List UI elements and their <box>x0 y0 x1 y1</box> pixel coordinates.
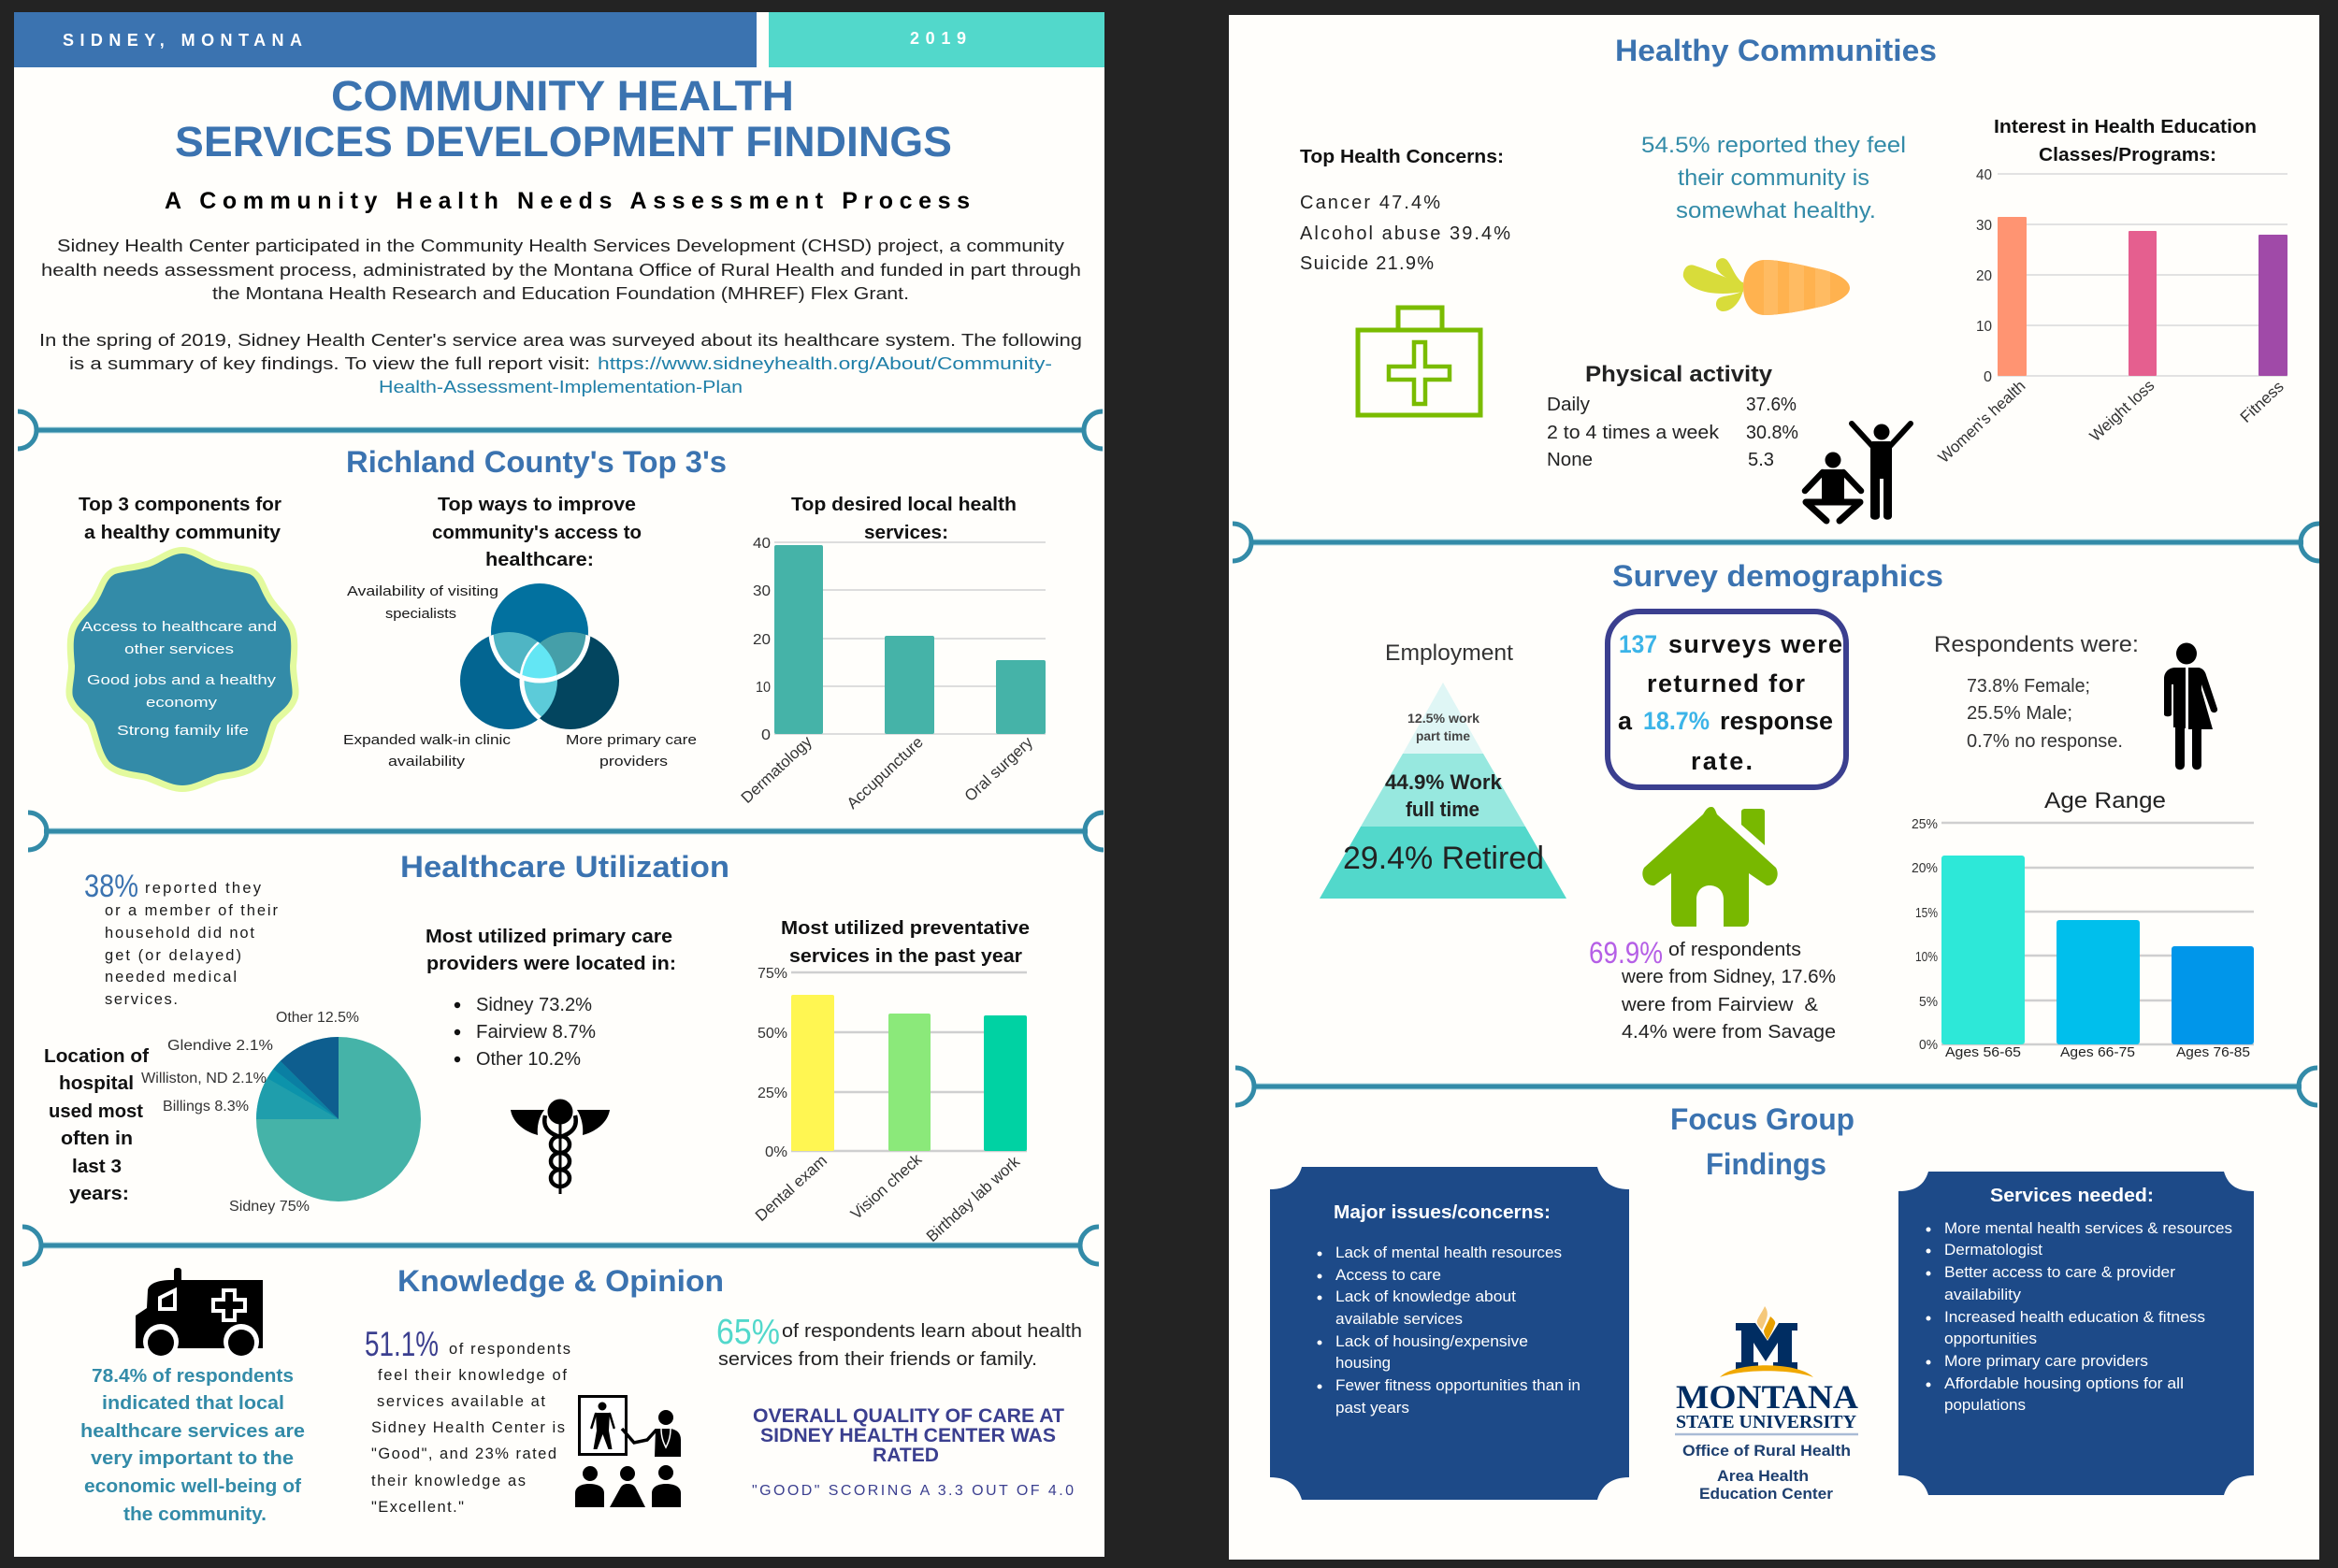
heading: top 3 components <box>79 495 281 543</box>
list: major issues: Access to care <box>1335 1266 1441 1284</box>
heading: top 3 components: a healthy community <box>84 523 281 543</box>
badge text: Strong family life <box>117 723 249 739</box>
heading: preventative <box>781 918 1030 967</box>
text block: 51.1%: 51.1% <box>365 1325 439 1363</box>
callout: 54.5% <box>1641 133 1906 223</box>
venn labels: Expanded walk-in clinic <box>343 732 512 748</box>
bar chart: age range: 5% <box>1919 994 1938 1010</box>
section heading: Healthcare Utilization: Healthcare Utilization <box>400 850 729 884</box>
text block: location of hospital: often in <box>61 1129 133 1149</box>
icon: ambulance <box>136 1268 263 1359</box>
list: major issues <box>1317 1244 1580 1417</box>
bar chart: age range: 15% <box>1915 905 1938 921</box>
text block: 51.1%: feel their knowledge of <box>378 1367 567 1384</box>
heading: ways to improve: Top ways to improve <box>438 495 636 515</box>
list: major issues: Lack of housing/expensive <box>1335 1332 1528 1350</box>
heading: employment: Employment <box>1385 640 1513 666</box>
text block: respondents <box>1934 632 2139 752</box>
text block: location of hospital: used most <box>49 1101 143 1122</box>
text block: 69.9%: were from Sidney, 17.6% <box>1621 967 1836 987</box>
callout: survey response box: 18.7% <box>1643 707 1710 735</box>
text block: 51.1%: Sidney Health Center is <box>371 1419 565 1436</box>
icon: carrot <box>1683 257 1852 318</box>
text block: 51.1%: "Good", and 23% rated <box>371 1446 556 1462</box>
text block: 78.4%: healthcare services are <box>80 1421 305 1442</box>
bar chart: desired services <box>738 536 1046 813</box>
badge text: other services <box>124 641 234 657</box>
list: services needed: populations <box>1944 1396 2026 1414</box>
text block: 65%: services from their friends or family. <box>718 1349 1037 1370</box>
callout: overall quality: "GOOD" SCORING A 3.3 OUT OF 4.0 <box>752 1483 1074 1499</box>
list: services needed: More primary care providers <box>1944 1352 2148 1370</box>
text block: primary care providers: Fairview 8.7% <box>476 1022 596 1043</box>
text block: location of hospital <box>44 1046 149 1204</box>
intro text: https://www.sidneyhealth.org/About/Community- <box>598 354 1052 373</box>
table: physical activity: Daily <box>1547 395 1590 415</box>
bar chart: preventative: 25% <box>758 1086 787 1101</box>
panel: top 3 components <box>72 495 293 785</box>
venn labels: More primary care <box>566 732 697 748</box>
bar chart: preventative: Birthday lab work <box>923 1153 1023 1245</box>
callout: 54.5%: somewhat healthy. <box>1676 198 1876 223</box>
heading: age range: Age Range <box>2044 788 2166 813</box>
text block: 69.9%: were from Fairview & <box>1621 995 1819 1015</box>
heading: ways to improve: healthcare: <box>485 550 594 570</box>
text block: 51.1%: services available at <box>377 1393 545 1410</box>
text block: 78.4%: very important to the <box>91 1448 294 1469</box>
panel: preventative services <box>752 918 1030 1245</box>
heading: top 3 components: Top 3 components for <box>79 495 281 515</box>
section heading: Focus Group Findings: Findings <box>1706 1147 1826 1181</box>
title <box>175 72 952 165</box>
text block: primary care providers: Other 10.2% <box>476 1049 581 1070</box>
bar chart: preventative: 0% <box>765 1144 787 1160</box>
list: major issues: past years <box>1335 1399 1409 1417</box>
bar chart: preventative: 50% <box>758 1026 787 1042</box>
subtitle: A Community Health Needs Assessment Process <box>165 188 970 214</box>
list: services needed: More mental health services & resources <box>1944 1219 2232 1237</box>
pie chart: hospital location: Billings 8.3% <box>163 1099 249 1115</box>
section heading: Focus Group Findings: Focus Group <box>1670 1102 1855 1136</box>
venn diagram <box>460 583 619 729</box>
bar chart: desired services: 20 <box>753 632 771 648</box>
bar chart: age range: Ages 66-75 <box>2060 1044 2135 1060</box>
list: services needed: Dermatologist <box>1944 1241 2042 1259</box>
badge text: economy <box>146 695 218 711</box>
bar chart: age range: Ages 76-85 <box>2176 1044 2250 1060</box>
text block: location of hospital: Location of <box>44 1046 149 1067</box>
intro text: Health-Assessment-Implementation-Plan <box>379 378 743 396</box>
text block: 65%: of respondents learn about health <box>782 1321 1082 1342</box>
heading: preventative: Most utilized preventative <box>781 918 1030 939</box>
callout: survey response box: rate. <box>1691 747 1753 775</box>
callout: 54.5%: their community is <box>1678 165 1869 191</box>
text block: 65%: 65% <box>716 1313 780 1352</box>
pyramid: employment: 44.9% Work <box>1385 770 1503 794</box>
bar chart: desired services: 0 <box>761 727 771 743</box>
section heading: Focus Group Findings <box>1670 1102 1855 1181</box>
venn labels: providers <box>599 754 668 770</box>
bar chart: age range: 0% <box>1919 1037 1938 1053</box>
icon: caduceus <box>511 1100 610 1194</box>
bar chart: preventative: Vision check <box>847 1150 926 1223</box>
intro text: is a summary of key findings. To view the full report visit: <box>69 354 590 373</box>
list: services needed: Affordable housing options for all <box>1944 1374 2184 1392</box>
table: physical activity: 37.6% <box>1746 395 1797 415</box>
table: physical activity: Physical activity <box>1585 362 1773 387</box>
text block: 78.4% <box>80 1366 305 1525</box>
panel: major issues: Major issues/concerns: <box>1334 1202 1551 1223</box>
logo: Montana State University: Area Health <box>1717 1467 1809 1485</box>
pie chart: hospital location: Sidney 75% <box>229 1199 310 1215</box>
bar chart: health education: 40 <box>1976 167 1992 183</box>
text block: top health concerns: Alcohol abuse 39.4% <box>1300 223 1510 244</box>
badge text: Access to healthcare and <box>81 619 277 635</box>
badge text: Good jobs and a healthy <box>87 672 277 688</box>
list: major issues: Lack of mental health resources <box>1335 1244 1562 1261</box>
text block: 69.9%: 4.4% were from Savage <box>1622 1022 1836 1043</box>
heading: desired services: services: <box>864 523 948 543</box>
text block: respondents: 0.7% no response. <box>1967 731 2123 752</box>
heading: desired services <box>791 495 1017 543</box>
heading: ways to improve: community's access to <box>432 523 642 543</box>
panel: services needed <box>1898 1172 2254 1495</box>
pie chart: hospital location: Glendive 2.1% <box>167 1038 273 1054</box>
heading: health education <box>1994 117 2257 165</box>
pyramid: employment: part time <box>1416 728 1470 743</box>
bar chart: health education: Fitness <box>2237 378 2287 426</box>
panel: page two <box>1229 15 2319 1560</box>
intro text: In the spring of 2019, Sidney Health Center's service area was surveyed about its healthcare system. The following <box>39 331 1082 350</box>
icon: exercising people <box>1805 424 1911 521</box>
text block: respondents: Respondents were: <box>1934 632 2139 657</box>
panel: health education interest <box>1935 117 2287 467</box>
text block: 38% delayed care: needed medical <box>105 969 237 985</box>
list: major issues: housing <box>1335 1354 1391 1372</box>
panel: major issues <box>1270 1167 1629 1500</box>
callout: 54.5%: 54.5% reported they feel <box>1641 133 1906 158</box>
bar chart: age range: 10% <box>1915 949 1938 965</box>
text block: top health concerns <box>1300 147 1510 274</box>
text block: top health concerns: Suicide 21.9% <box>1300 253 1434 274</box>
text block: 78.4%: economic well-being of <box>84 1476 301 1497</box>
bar chart: age range: Ages 56-65 <box>1945 1044 2021 1060</box>
pyramid: employment: 12.5% work <box>1407 711 1479 726</box>
pie chart: hospital location <box>141 1010 421 1215</box>
text block: primary care providers: Sidney 73.2% <box>476 995 592 1015</box>
text block: 69.9% <box>1589 936 1836 1043</box>
bar chart: desired services: 10 <box>756 680 771 696</box>
text block: 38% delayed care: reported they <box>145 880 262 897</box>
heading: health education: Classes/Programs: <box>2039 145 2216 165</box>
text block: 78.4%: the community. <box>123 1504 267 1525</box>
scalloped badge <box>72 554 293 785</box>
pyramid: employment: 29.4% Retired <box>1343 841 1544 876</box>
bar chart: desired services: Dermatology <box>738 732 815 807</box>
text block: 78.4%: indicated that local <box>102 1393 284 1414</box>
section heading: Survey demographics: Survey demographics <box>1612 559 1943 593</box>
icon: house <box>1642 807 1778 927</box>
venn labels: availability <box>388 754 466 770</box>
callout: survey response box: returned for <box>1647 669 1805 698</box>
text block: 38% delayed care: get (or delayed) <box>105 947 241 964</box>
bar chart: health education: 20 <box>1976 268 1992 284</box>
panel: top desired services <box>738 495 1046 813</box>
bar chart: health education: Women's health <box>1935 377 2028 467</box>
icon: doctor teaching <box>575 1397 681 1507</box>
bar chart: age range <box>1912 816 2254 1060</box>
text block: primary care providers <box>426 927 676 1070</box>
bar chart: age range: 20% <box>1912 860 1938 876</box>
pie chart: hospital location: Williston, ND 2.1% <box>141 1071 267 1086</box>
header band: location <box>14 12 757 67</box>
bar chart: desired services: Oral surgery <box>961 733 1036 805</box>
heading: desired services: Top desired local health <box>791 495 1017 515</box>
list: services needed: opportunities <box>1944 1330 2037 1347</box>
intro text <box>39 237 1082 396</box>
text block: 69.9%: of respondents <box>1668 940 1801 960</box>
pie chart: hospital location: Other 12.5% <box>276 1010 359 1026</box>
callout: overall quality: OVERALL QUALITY OF CARE AT <box>753 1405 1064 1427</box>
text block: 38% delayed care <box>84 869 279 1008</box>
callout: survey response box: a <box>1618 707 1633 735</box>
list: major issues: Fewer fitness opportunities than in <box>1335 1376 1580 1394</box>
callout: overall quality: SIDNEY HEALTH CENTER WAS <box>760 1425 1056 1446</box>
list: major issues: Lack of knowledge about <box>1335 1287 1516 1305</box>
text block: top health concerns: Top Health Concerns: <box>1300 147 1504 167</box>
panel: age range <box>1912 788 2254 1060</box>
text block: 69.9%: 69.9% <box>1589 936 1663 970</box>
pyramid: employment: full time <box>1406 798 1479 821</box>
badge text <box>81 619 277 739</box>
header band: year: 2019 <box>910 29 966 48</box>
bar chart: desired services: Accupuncture <box>844 733 927 813</box>
bar chart: desired services: 40 <box>753 536 771 552</box>
text block: 38% delayed care: 38% <box>84 869 138 904</box>
bar chart: health education <box>1935 167 2287 467</box>
bar chart: health education: Weight loss <box>2086 377 2158 445</box>
table: physical activity: 30.8% <box>1746 423 1798 443</box>
heading: health education: Interest in Health Education <box>1994 117 2257 137</box>
callout: overall quality <box>752 1405 1074 1499</box>
panel: page one <box>14 12 1104 1557</box>
bar chart: age range: 25% <box>1912 816 1938 832</box>
text block: 51.1% <box>365 1325 570 1516</box>
table: physical activity: None <box>1547 450 1593 470</box>
text block: primary care providers: Most utilized primary care <box>426 927 672 947</box>
bar chart: health education: 10 <box>1976 319 1992 335</box>
intro text: Sidney Health Center participated in the Community Health Services Development (CHSD) project, a community <box>57 237 1064 255</box>
intro text: health needs assessment process, administrated by the Montana Office of Rural Health and funded in part through <box>41 261 1081 280</box>
callout: survey response box: surveys were <box>1668 630 1842 658</box>
bar chart: preventative <box>752 966 1027 1245</box>
bar chart: preventative: Dental exam <box>752 1152 830 1225</box>
bar chart: health education: 30 <box>1976 218 1992 234</box>
bar chart: desired services: 30 <box>753 583 771 599</box>
callout: survey response box <box>1608 611 1846 787</box>
text block: 51.1%: of respondents <box>449 1341 570 1358</box>
venn labels <box>343 583 697 770</box>
callout: survey response box: response <box>1720 707 1833 735</box>
panel: ways to improve access <box>343 495 697 770</box>
text block: 51.1%: "Excellent." <box>371 1499 464 1516</box>
heading: ways to improve <box>432 495 642 570</box>
icon: first aid kit <box>1358 308 1480 415</box>
section heading: Knowledge & Opinion: Knowledge & Opinion <box>397 1264 724 1298</box>
logo: Montana State University: MONTANA <box>1676 1378 1858 1416</box>
table: physical activity: 5.3 <box>1748 450 1774 470</box>
logo: Montana State University: Education Center <box>1699 1485 1833 1503</box>
section heading: Healthy Communities: Healthy Communities <box>1615 34 1937 67</box>
header band: location: SIDNEY, MONTANA <box>63 31 302 50</box>
title: COMMUNITY HEALTH <box>331 72 794 120</box>
bar chart: health education: 0 <box>1984 369 1992 385</box>
text block: respondents: 25.5% Male; <box>1967 703 2072 724</box>
title: SERVICES DEVELOPMENT FINDINGS <box>175 118 952 165</box>
table: physical activity: 2 to 4 times a week <box>1547 423 1720 443</box>
text block: 38% delayed care: or a member of their <box>105 902 279 919</box>
text block: respondents: 73.8% Female; <box>1967 676 2090 697</box>
logo: Montana State University: Office of Rural Health <box>1682 1442 1851 1460</box>
venn labels: Availability of visiting <box>347 583 498 599</box>
panel: services needed: Services needed: <box>1990 1186 2154 1206</box>
callout: overall quality: RATED <box>873 1445 939 1466</box>
list: services needed <box>1927 1219 2232 1414</box>
list: services needed: Increased health education & fitness <box>1944 1308 2205 1326</box>
callout: survey response box: 137 <box>1619 630 1657 658</box>
text block: location of hospital: hospital <box>59 1073 134 1094</box>
text block: top health concerns: Cancer 47.4% <box>1300 193 1440 213</box>
pyramid: employment <box>1320 683 1566 899</box>
logo: Montana State University <box>1675 1306 1858 1503</box>
text block: location of hospital: years: <box>69 1184 129 1204</box>
text block: 38% delayed care: household did not <box>105 925 254 942</box>
table: physical activity <box>1547 362 1798 470</box>
list: major issues: available services <box>1335 1310 1463 1328</box>
text block: 38% delayed care: services. <box>105 991 178 1008</box>
text block: 78.4%: 78.4% of respondents <box>92 1366 294 1387</box>
heading: preventative: services in the past year <box>789 946 1022 967</box>
logo: Montana State University: STATE UNIVERSITY <box>1676 1412 1857 1432</box>
text block: primary care providers: providers were located in: <box>426 954 676 974</box>
bar chart: preventative: 75% <box>758 966 787 982</box>
text block: location of hospital: last 3 <box>72 1157 122 1177</box>
text block: 51.1%: their knowledge as <box>371 1473 526 1489</box>
icon: male and female person <box>2164 643 2217 770</box>
list: services needed: availability <box>1944 1286 2022 1303</box>
intro text: the Montana Health Research and Education Foundation (MHREF) Flex Grant. <box>212 284 909 303</box>
text block: 65% <box>716 1313 1082 1370</box>
venn labels: specialists <box>385 606 456 622</box>
section heading: Richland County's Top 3's: Richland County's Top 3's <box>346 445 727 479</box>
header band: year <box>769 12 1104 67</box>
list: services needed: Better access to care & provider <box>1944 1263 2175 1281</box>
